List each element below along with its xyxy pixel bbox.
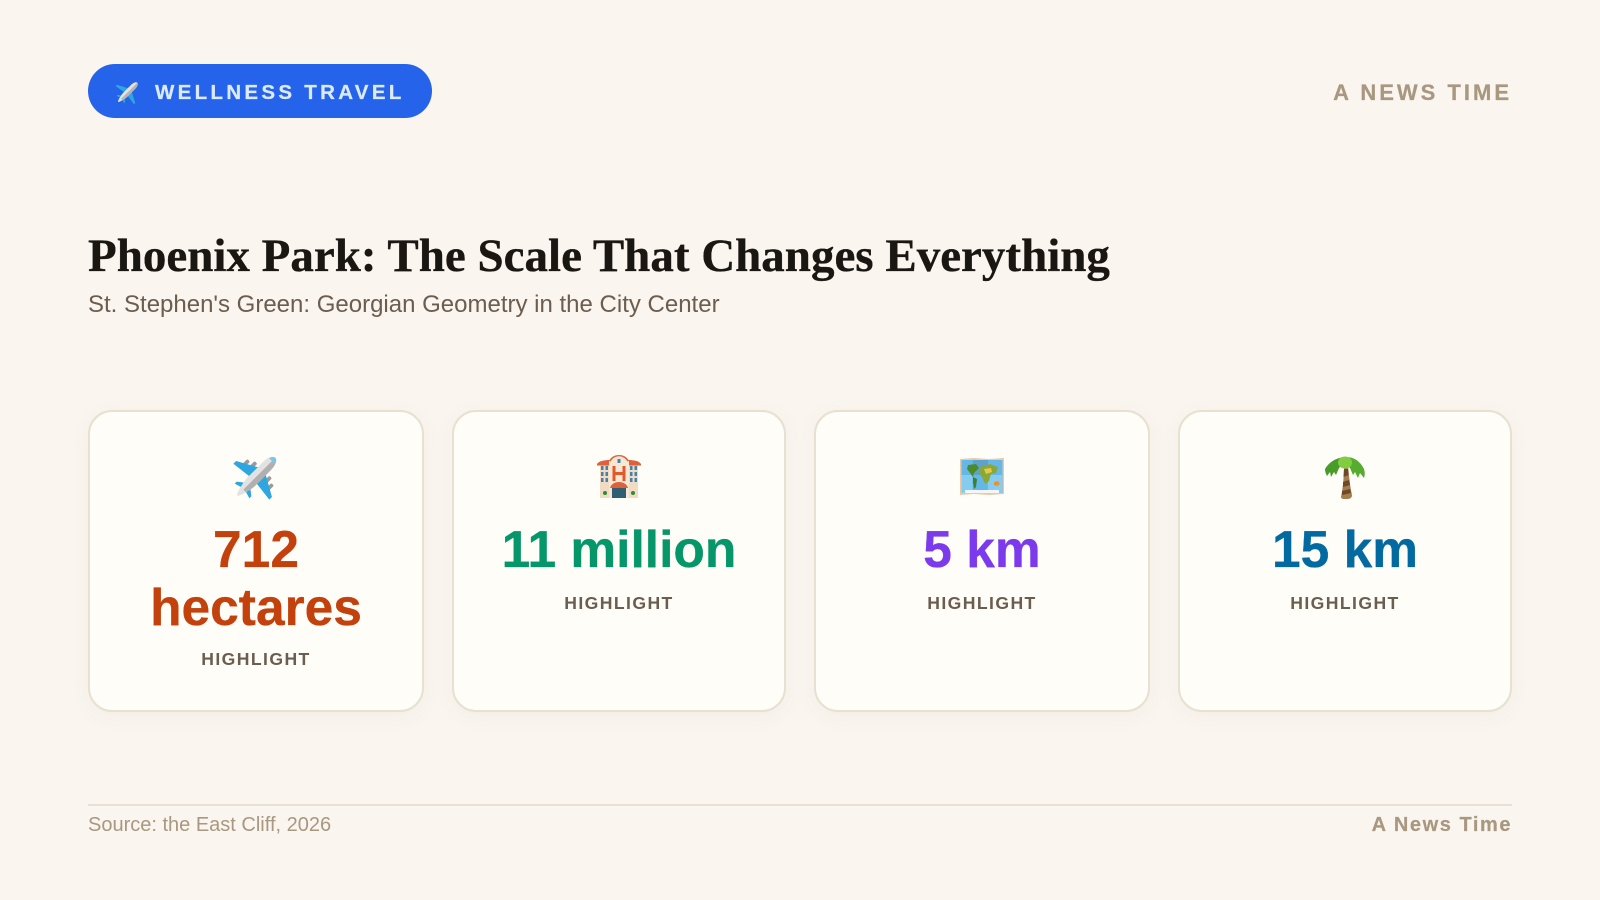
stat label: HIGHLIGHT bbox=[201, 649, 311, 669]
footer brand: A News Time bbox=[1372, 814, 1512, 836]
stat value bbox=[150, 520, 362, 636]
stat label: HIGHLIGHT bbox=[1290, 593, 1400, 613]
title: Phoenix Park: The Scale That Changes Everything bbox=[88, 230, 1110, 282]
subtitle: St. Stephen's Green: Georgian Geometry in the City Center bbox=[88, 291, 720, 318]
source note: Source: the East Cliff, 2026 bbox=[88, 814, 331, 836]
panel: 5 km bbox=[814, 410, 1150, 712]
category badge bbox=[88, 64, 432, 118]
panel: 11 million bbox=[452, 410, 786, 712]
icon: hotel bbox=[597, 455, 641, 498]
panel: 712 hectares bbox=[88, 410, 424, 712]
icon: map bbox=[960, 458, 1004, 495]
stat value: 712 bbox=[213, 520, 299, 578]
stat value: 15 km bbox=[1272, 520, 1418, 578]
stat value: 5 km bbox=[923, 520, 1041, 578]
icon: airplane bbox=[234, 456, 276, 500]
stat label: HIGHLIGHT bbox=[564, 593, 674, 613]
icon: palm tree bbox=[1325, 456, 1365, 499]
stat label: HIGHLIGHT bbox=[927, 593, 1037, 613]
stat value: hectares bbox=[150, 578, 362, 636]
stat value: 11 million bbox=[502, 520, 736, 578]
panel: 15 km bbox=[1178, 410, 1512, 712]
badge label: WELLNESS TRAVEL bbox=[155, 81, 405, 104]
icon: airplane small bbox=[116, 82, 138, 104]
brand name: A NEWS TIME bbox=[1333, 80, 1512, 105]
